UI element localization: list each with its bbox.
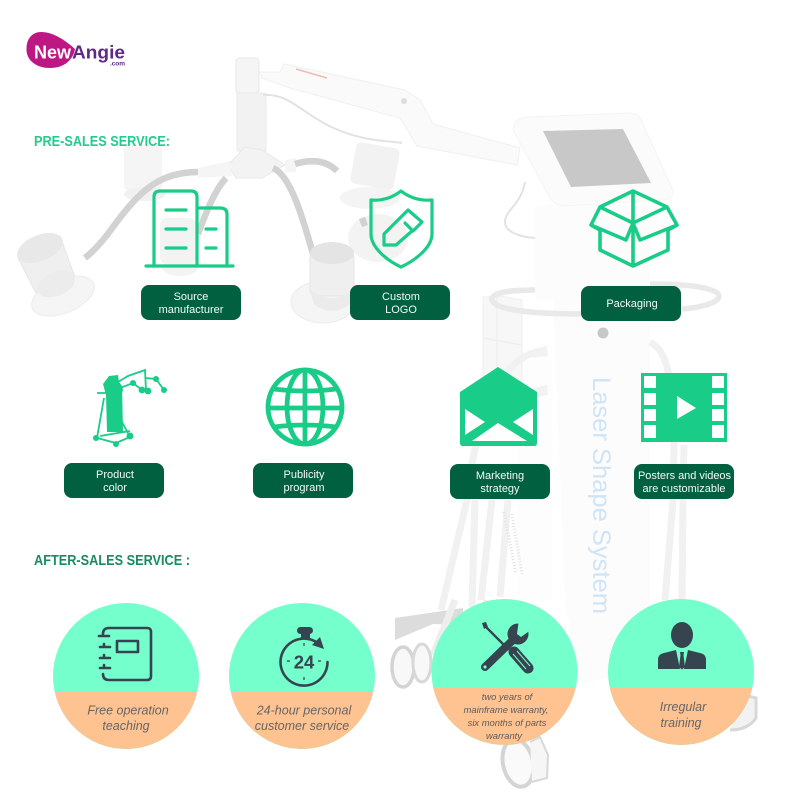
circle: warranty: mainframe warranty, — [464, 704, 548, 715]
machine front heads — [13, 227, 355, 324]
icon: businessman — [658, 622, 706, 670]
label: Posters and videos — [638, 470, 732, 482]
caption: Irregular — [660, 700, 707, 714]
icon: stopwatch 24 — [281, 627, 328, 686]
icon: wrench and screwdriver — [482, 619, 533, 669]
item: posters and videos — [634, 373, 734, 499]
label: Custom — [382, 291, 420, 303]
machine arm — [198, 58, 520, 178]
circle: warranty — [432, 599, 578, 745]
label — [634, 464, 734, 499]
item: source manufacturer — [141, 191, 241, 320]
caption: two years of — [482, 691, 534, 702]
label — [450, 464, 550, 499]
logo — [26, 32, 125, 68]
label: Marketing — [476, 470, 524, 482]
caption: 24-hour personal — [256, 704, 352, 718]
machine base — [395, 608, 463, 640]
logo wordmark: New — [34, 42, 72, 62]
icon: machine silhouette — [93, 370, 167, 447]
machine tubes — [441, 352, 543, 610]
label: Source — [174, 291, 208, 303]
circle: irregular training: training — [660, 716, 702, 730]
machine tower — [392, 113, 756, 790]
icon: notebook — [99, 628, 151, 680]
label — [141, 285, 241, 320]
label — [253, 463, 353, 498]
label: strategy — [480, 483, 520, 495]
label — [64, 463, 164, 498]
icon: buildings — [146, 191, 233, 266]
circle: warranty: warranty — [486, 730, 523, 741]
circle: irregular training — [608, 599, 754, 745]
circle: free operation teaching: teaching — [102, 719, 150, 733]
item: custom logo — [350, 191, 450, 320]
icon: open box — [591, 191, 677, 266]
label: program — [284, 482, 324, 494]
label: Packaging — [606, 298, 658, 310]
label: Product — [96, 469, 134, 481]
heading: pre-sales: PRE-SALES SERVICE: — [34, 133, 170, 150]
machine ring — [492, 284, 719, 314]
machine wheels — [392, 644, 756, 790]
label — [350, 285, 450, 320]
logo: Angie — [72, 42, 125, 62]
label: LOGO — [385, 304, 417, 316]
item: packaging — [581, 191, 681, 321]
item: publicity program — [253, 370, 353, 498]
circle: free operation teaching — [53, 603, 199, 749]
machine cords — [85, 161, 365, 258]
machine back heads — [124, 141, 408, 276]
circle: 24-hour service: customer service — [255, 719, 349, 733]
label: manufacturer — [159, 304, 224, 316]
heading: after-sales: AFTER-SALES SERVICE : — [34, 552, 190, 569]
circle: 24-hour service — [229, 603, 375, 749]
label: color — [103, 482, 127, 494]
item: product color — [64, 370, 167, 498]
label: are customizable — [642, 483, 726, 495]
icon: shield with pencil — [371, 191, 432, 267]
item: marketing strategy — [450, 367, 550, 499]
circle: warranty: six months of parts — [468, 717, 547, 728]
label: Publicity — [284, 469, 325, 481]
icon: film strip with play — [641, 373, 727, 442]
caption: Free operation — [87, 704, 169, 718]
icon: globe — [268, 370, 342, 444]
logo: .com — [110, 60, 125, 68]
machine side tray — [483, 296, 522, 420]
icon: stopwatch 24: 24 — [294, 652, 315, 672]
machine label: Laser Shape System — [587, 377, 615, 614]
logo blob — [26, 32, 75, 68]
icon: open envelope — [460, 367, 537, 446]
